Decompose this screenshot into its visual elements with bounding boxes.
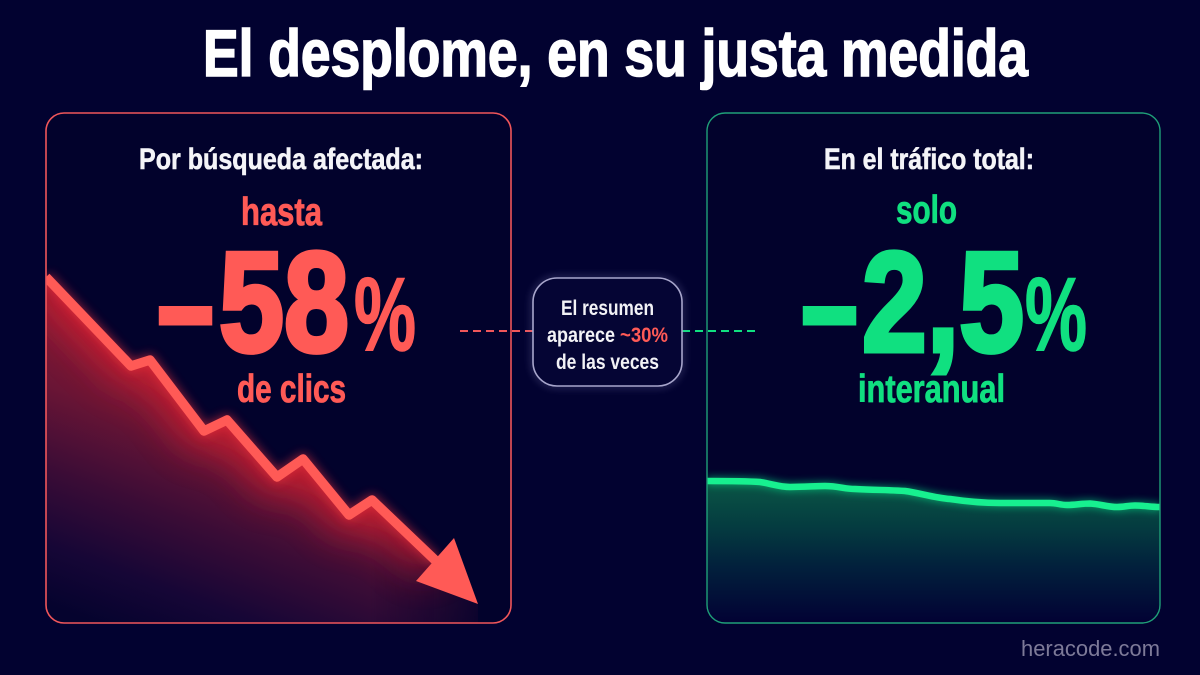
big number: -2,5%: % bbox=[1025, 257, 1087, 373]
big number: -2,5%: 2,5 bbox=[862, 223, 1024, 382]
panel: per affected search bbox=[46, 113, 511, 640]
chart: falling red area with arrow bbox=[46, 277, 478, 640]
callout text: ~30% bbox=[620, 324, 668, 347]
big number: -58% bbox=[156, 223, 416, 394]
callout text: El resumen bbox=[561, 297, 654, 320]
callout text bbox=[547, 297, 668, 374]
connector: red dashed line bbox=[460, 330, 533, 332]
panel border bbox=[707, 113, 1160, 623]
connector: green dashed line bbox=[682, 330, 755, 332]
panel heading: En el tráfico total: bbox=[824, 143, 1034, 176]
callout bbox=[533, 278, 682, 386]
big number: -2,5% bbox=[800, 223, 1087, 394]
label: de clics: de clics bbox=[237, 368, 346, 411]
label: interanual: interanual bbox=[858, 368, 1005, 411]
big number: -58%: − bbox=[156, 235, 215, 394]
panel border bbox=[46, 113, 511, 623]
title: El desplome, en su justa medida bbox=[203, 16, 1029, 90]
panel: total traffic bbox=[707, 113, 1160, 625]
big number: -58%: % bbox=[354, 257, 416, 373]
label: hasta: hasta bbox=[241, 191, 322, 234]
label: solo: solo bbox=[896, 189, 957, 232]
panel heading: Por búsqueda afectada: bbox=[139, 143, 423, 176]
callout text: aparece bbox=[547, 324, 615, 347]
big number: -58%: 58 bbox=[219, 223, 349, 382]
chart: nearly flat green area bbox=[707, 481, 1160, 625]
big number: -2,5%: − bbox=[800, 235, 859, 394]
watermark: heracode.com bbox=[1021, 636, 1160, 661]
callout text: de las veces bbox=[556, 351, 659, 374]
